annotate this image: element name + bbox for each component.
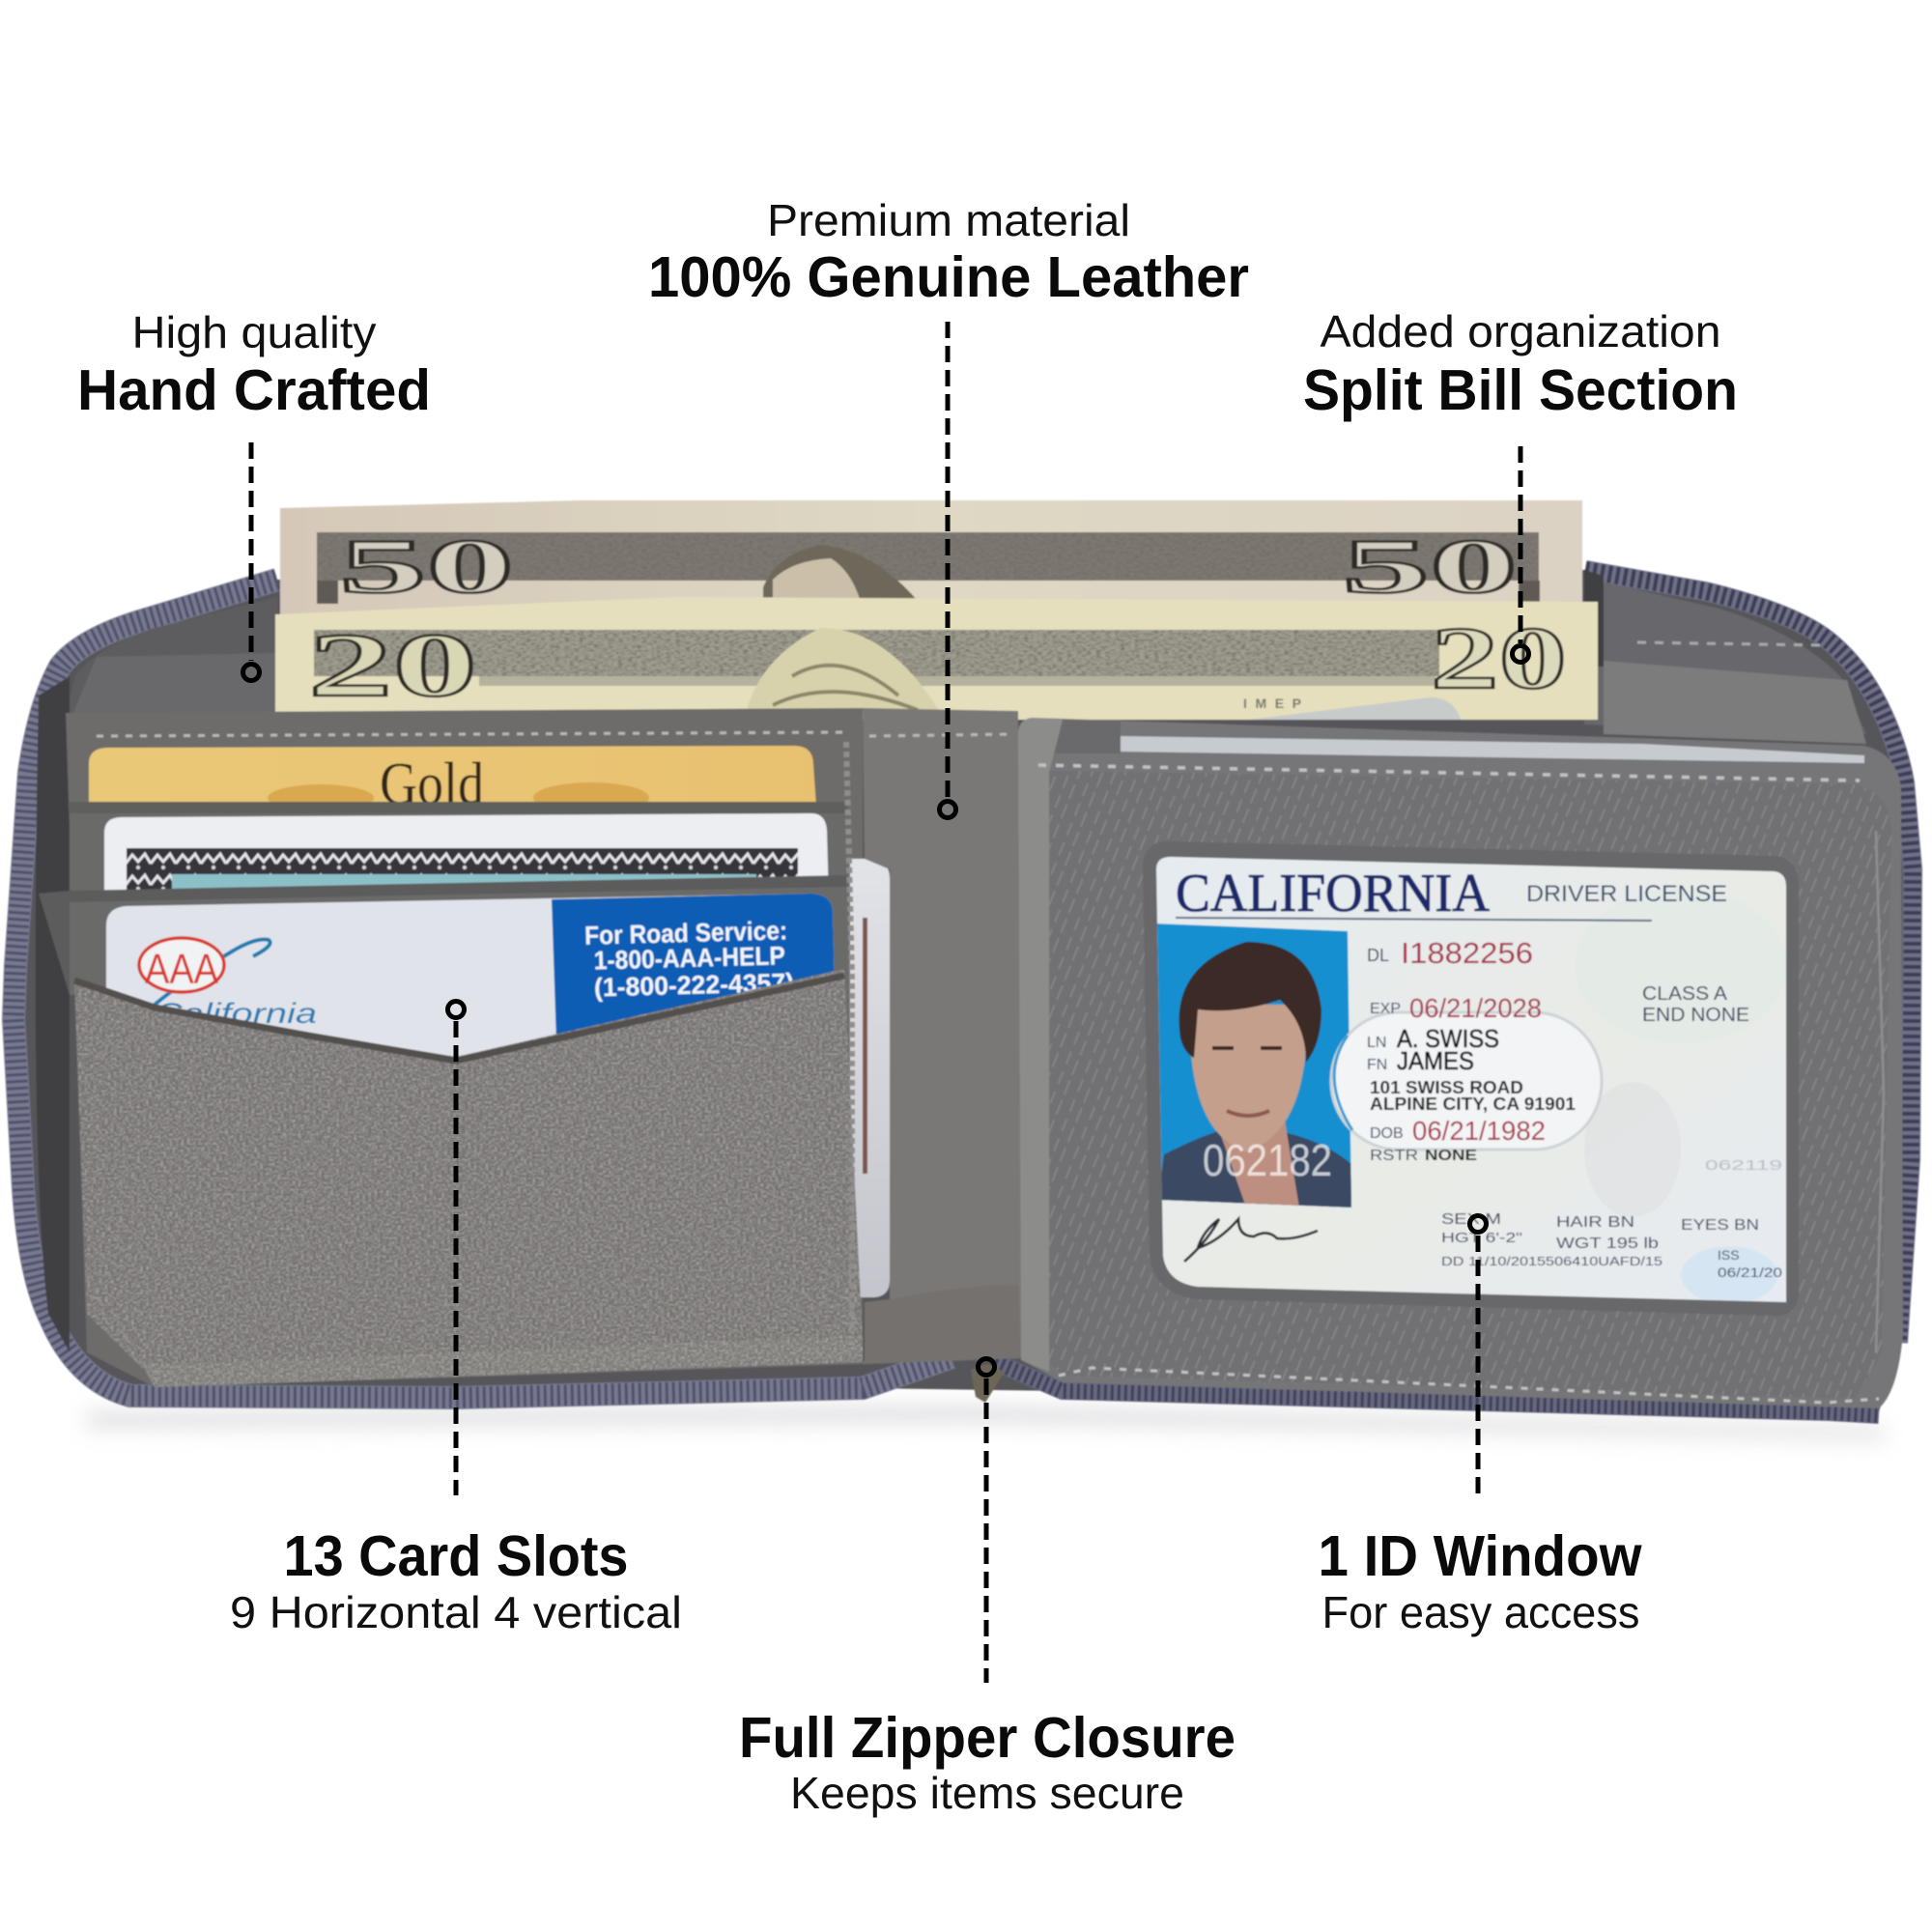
license text: 101 SWISS ROAD: [1370, 1078, 1523, 1097]
license text: WGT 195 lb: [1556, 1236, 1659, 1252]
AAA logo: [139, 938, 270, 1005]
hologram oval: [1331, 1012, 1602, 1150]
label text: [1318, 1524, 1642, 1637]
driver license: [1150, 850, 1797, 1314]
label text: 1 ID Window: [1318, 1524, 1642, 1588]
signature: [1184, 1219, 1318, 1262]
50 numerals: 50: [339, 525, 514, 610]
card peeking behind bill: [1249, 697, 1461, 720]
label text: Keeps items secure: [790, 1768, 1184, 1818]
center spine: [863, 708, 1021, 1364]
$20 bill: 20: [1431, 609, 1567, 707]
callout: split bill section: [1303, 306, 1738, 663]
road service text: 1-800-AAA-HELP: [593, 941, 785, 976]
zipper puller: [971, 1364, 1005, 1403]
ID window frame: [1143, 841, 1799, 1316]
AAA card: [106, 894, 837, 1072]
gold card: Gold: [380, 752, 484, 817]
wallet photo: [14, 500, 1913, 1439]
label text: [1303, 306, 1738, 422]
upper right interior leather: [1584, 578, 1866, 734]
license text: ISS: [1718, 1247, 1740, 1263]
license text: DRIVER LICENSE: [1526, 881, 1727, 907]
callout: ID window: [1318, 1215, 1642, 1637]
label text: 100% Genuine Leather: [648, 245, 1249, 309]
license text: HAIR BN: [1556, 1214, 1634, 1231]
white card: [104, 813, 829, 898]
road service text: For Road Service:: [584, 916, 787, 951]
second slot: [70, 802, 847, 918]
license text: FN: [1367, 1057, 1387, 1073]
panel bottom fold: [142, 1336, 863, 1387]
label text: 9 Horizontal 4 vertical: [230, 1587, 682, 1637]
zipper: [14, 570, 1913, 1415]
AAA logo: AAA: [145, 946, 219, 993]
license text: EYES BN: [1681, 1217, 1759, 1234]
label text: Full Zipper Closure: [739, 1706, 1236, 1770]
card edge in flap: [1121, 736, 1864, 763]
license text: 06/21/20: [1718, 1264, 1782, 1280]
license text: CLASS A: [1642, 983, 1728, 1005]
road service text: (1-800-222-4357): [594, 968, 794, 1003]
label text: Premium material: [767, 195, 1130, 245]
license text: SEX M: [1441, 1211, 1501, 1228]
callout: card slots: [230, 1001, 682, 1637]
label text: Split Bill Section: [1303, 358, 1738, 422]
label text: 13 Card Slots: [284, 1524, 628, 1588]
label text: [230, 1524, 682, 1637]
$20 bill: IMEP: [1243, 696, 1301, 711]
label text: [77, 307, 431, 422]
license text: ALPINE CITY, CA 91901: [1370, 1094, 1576, 1114]
left card panel: [36, 676, 890, 1387]
license text: 06/21/1982: [1412, 1116, 1546, 1146]
license text: A. SWISS: [1397, 1024, 1499, 1053]
callout: zipper closure: [739, 1358, 1236, 1818]
road service text: [584, 916, 794, 1003]
label text: High quality: [131, 307, 377, 357]
label text: [739, 1706, 1236, 1818]
license text: I1882256: [1401, 936, 1533, 970]
third slot: [39, 875, 847, 995]
20 numerals: 20: [308, 615, 477, 716]
license text: NONE: [1425, 1148, 1477, 1164]
license text: 062119: [1705, 1157, 1782, 1174]
license text: EXP: [1370, 1001, 1401, 1017]
wallet interior: [14, 570, 1913, 1412]
wallet drop shadow: [87, 1406, 1884, 1439]
$50 bill: [280, 500, 1582, 618]
label text: Hand Crafted: [77, 358, 431, 422]
$50 bill: 50: [1342, 525, 1518, 610]
vertical card slot: [850, 859, 890, 1297]
license text: 06/21/2028: [1409, 993, 1542, 1023]
license text: END NONE: [1642, 1005, 1749, 1026]
label text: For easy access: [1321, 1587, 1640, 1637]
license text: CALIFORNIA: [1176, 864, 1491, 923]
callout: hand crafted: [77, 307, 431, 680]
license text: [1176, 864, 1782, 1280]
ID photo: 062182: [1203, 1135, 1332, 1185]
AAA card: California: [155, 998, 317, 1030]
ID photo: [1150, 918, 1357, 1212]
license text: LN: [1367, 1035, 1386, 1051]
license text: DOB: [1370, 1125, 1404, 1142]
label text: [648, 195, 1249, 309]
gold card: [89, 746, 816, 817]
V pocket: [74, 969, 863, 1368]
label text: Added organization: [1320, 306, 1721, 356]
$20 bill: [275, 597, 1598, 720]
license text: JAMES: [1397, 1046, 1474, 1075]
license text: DD 11/10/2015506410UAFD/15: [1441, 1254, 1662, 1268]
license text: HGT 6'-2": [1441, 1230, 1522, 1246]
panel stitching: [846, 742, 852, 1333]
callout: genuine leather: [648, 195, 1249, 817]
license text: DL: [1367, 946, 1389, 965]
right ID flap: [1018, 718, 1903, 1408]
license text: RSTR: [1370, 1148, 1418, 1164]
upper left interior leather: [66, 597, 277, 715]
